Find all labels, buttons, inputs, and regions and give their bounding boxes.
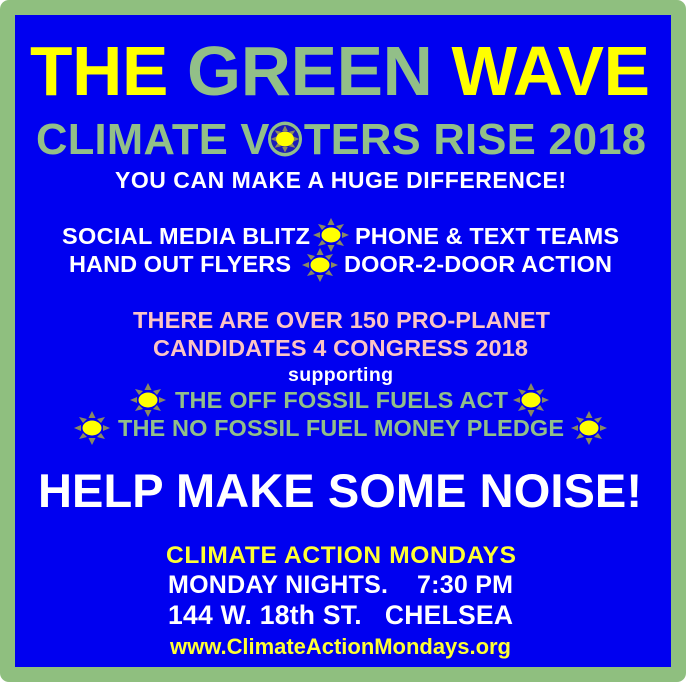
actions line 1: SOCIAL MEDIA BLITZ — [62, 223, 310, 249]
actions line 2: HAND OUT FLYERS — [69, 251, 291, 277]
icon: sun — [74, 411, 110, 445]
icon: sun — [513, 383, 549, 417]
tagline: YOU CAN MAKE A HUGE DIFFERENCE! — [115, 167, 566, 193]
candidates text — [133, 307, 551, 361]
event name: CLIMATE ACTION MONDAYS — [166, 542, 516, 569]
actions line 2: DOOR-2-DOOR ACTION — [344, 251, 612, 277]
no fossil fuel money pledge: THE NO FOSSIL FUEL MONEY PLEDGE — [118, 415, 564, 441]
actions line 1 — [62, 223, 619, 249]
website: www.ClimateActionMondays.org — [169, 634, 511, 659]
supporting: supporting — [288, 364, 393, 386]
off fossil fuels act: THE OFF FOSSIL FUELS ACT — [175, 387, 509, 413]
actions line 2 — [69, 251, 612, 277]
candidates text: CANDIDATES 4 CONGRESS 2018 — [153, 335, 528, 361]
event time: MONDAY NIGHTS. 7:30 PM — [168, 571, 513, 599]
call to action: HELP MAKE SOME NOISE! — [38, 464, 642, 517]
icon: sun in voters — [268, 122, 302, 156]
candidates text: THERE ARE OVER 150 PRO-PLANET — [133, 307, 551, 333]
actions line 1: PHONE & TEXT TEAMS — [355, 223, 619, 249]
icon: sun — [571, 411, 607, 445]
event address: 144 W. 18th ST. CHELSEA — [168, 600, 513, 630]
subtitle: CLIMATE VOTERS RISE 2018 — [36, 116, 646, 164]
icon: sun — [130, 383, 166, 417]
icon: sun — [302, 248, 338, 282]
title: THE GREEN WAVE — [30, 32, 650, 110]
icon: sun — [313, 218, 349, 252]
